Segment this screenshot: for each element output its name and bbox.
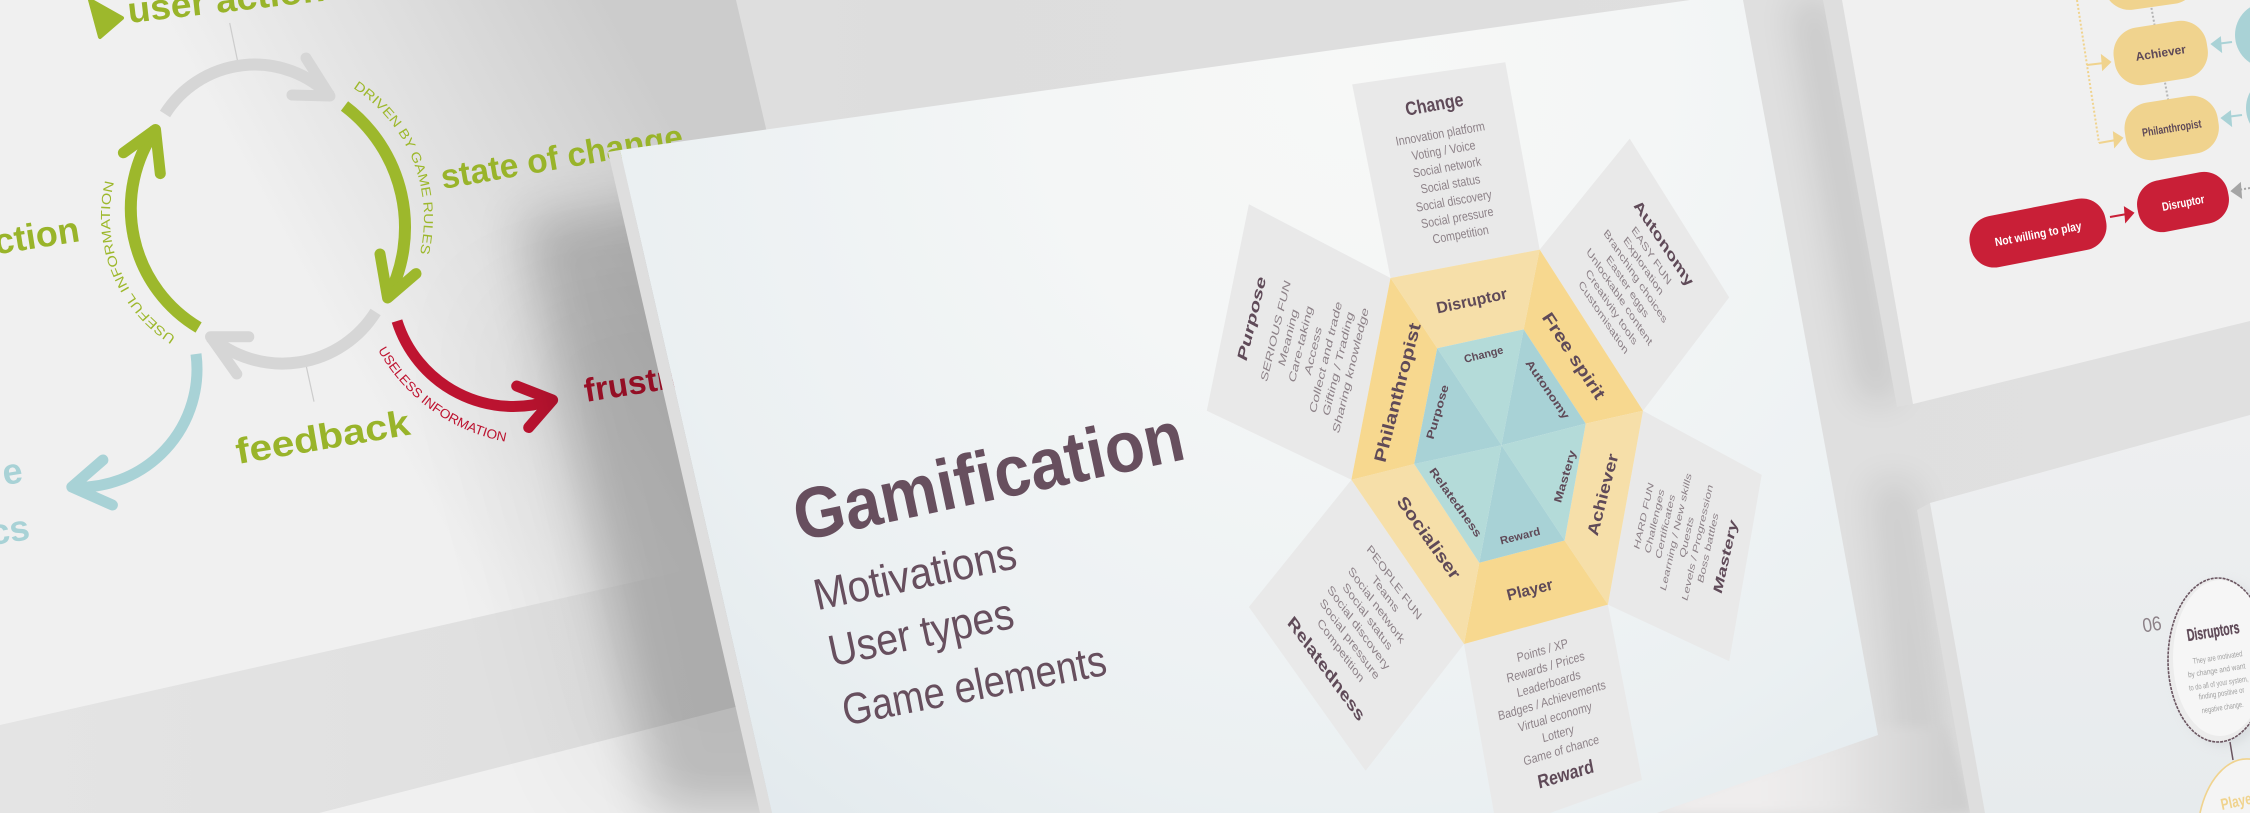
- circle: player: [2200, 759, 2250, 813]
- tick line: action: [230, 23, 238, 62]
- main slide shadows: [470, 0, 1960, 813]
- pill: achiever: [2110, 17, 2212, 89]
- dotted connector: grey between pills: [2150, 0, 2170, 110]
- pill: philanthropist: Philanthropist: [2141, 118, 2203, 140]
- label: feedback: feedback: [232, 402, 414, 472]
- dotted connector: yellow branch: [2077, 0, 2099, 143]
- card: autonomy: Autonomy: [1631, 195, 1697, 291]
- card: change: Social network: [1412, 155, 1483, 181]
- card: reward: Lottery: [1541, 722, 1575, 746]
- card: purpose: Meaning: [1276, 306, 1300, 368]
- card: change: [1352, 62, 1540, 278]
- label: state of change: state of change: [438, 118, 686, 197]
- number: 06: 06: [2141, 613, 2163, 637]
- card: change: Social status: [1419, 172, 1482, 197]
- hexagon: motivation core: [1414, 329, 1586, 563]
- arrow: teal to achiever: [2212, 38, 2232, 51]
- card: reward: Rewards / Prices: [1506, 649, 1586, 686]
- card: reward: Points / XP: [1516, 636, 1569, 665]
- card: reward: [1464, 605, 1642, 813]
- card: change: Innovation platform: [1394, 119, 1486, 149]
- panel: lower left slide: [319, 707, 900, 813]
- pill: top cropped: [2099, 0, 2201, 13]
- card: mastery: [1608, 411, 1762, 661]
- tick line: feedback: [306, 365, 314, 402]
- card: mastery: Levels / Progression: [1681, 483, 1715, 603]
- subtitle list: Game elements: [838, 636, 1110, 735]
- card: relatedness: Relatedness: [1285, 612, 1368, 725]
- card: relatedness: Social discovery: [1325, 583, 1392, 674]
- card: autonomy: Easter eggs: [1604, 253, 1650, 321]
- arrow: teal arc: [72, 354, 197, 505]
- circle: teal one: [2235, 2, 2250, 68]
- card: purpose: Gifting / Trading: [1320, 309, 1356, 418]
- card: mastery: Mastery: [1711, 516, 1741, 596]
- card: reward: Game of chance: [1522, 733, 1600, 769]
- title: Gamification: [786, 396, 1191, 557]
- hexagon: motivation core: Autonomy: [1522, 358, 1572, 423]
- hexagon: user type ring: Achiever: [1585, 452, 1622, 538]
- pill: disruptor: Disruptor: [2161, 192, 2206, 214]
- panel: feedback loop slide: [0, 0, 766, 725]
- card: autonomy: Exploration: [1621, 234, 1665, 298]
- label: frustration: frustration: [581, 347, 750, 409]
- circle: disruptors: [2168, 578, 2250, 746]
- card: autonomy: Customisation: [1577, 278, 1630, 357]
- card: relatedness: Competition: [1315, 616, 1366, 685]
- arrow: red arc: [397, 321, 553, 428]
- card: purpose: Access: [1302, 324, 1324, 377]
- hexagon: user type ring: Philanthropist: [1371, 321, 1425, 464]
- arrow: grey to disruptor: [2232, 184, 2250, 197]
- arrow: yellow to achiever: [2087, 56, 2110, 69]
- card: reward: Leaderboards: [1516, 668, 1582, 700]
- hexagon: user type ring: Disruptor: [1435, 286, 1509, 317]
- panel: main gamification slide: [608, 0, 1878, 813]
- hexagon: motivation core: Reward: [1499, 526, 1542, 547]
- card: relatedness: Social status: [1341, 580, 1394, 653]
- card: autonomy: EASY FUN: [1630, 224, 1673, 288]
- curved label: useless information: USELESS INFORMATION: [380, 346, 506, 442]
- card: relatedness: Teams: [1370, 573, 1401, 615]
- hexagon: motivation core: Purpose: [1425, 384, 1452, 441]
- connector: disruptors to player: [2230, 742, 2233, 760]
- hexagon: user type ring: Player: [1505, 577, 1555, 605]
- card: mastery: HARD FUN: [1633, 481, 1656, 551]
- subtitle list: Motivations: [809, 529, 1021, 620]
- arrow: green right arc: [344, 106, 416, 298]
- card: mastery: Challenges: [1644, 487, 1667, 555]
- card: autonomy: Creativity tools: [1584, 267, 1639, 348]
- card: purpose: SERIOUS FUN: [1258, 278, 1293, 384]
- arrow: grey bottom arc: [210, 312, 376, 374]
- card: relatedness: Social network: [1346, 564, 1407, 647]
- card: autonomy: Branching choices: [1602, 227, 1669, 326]
- arrow: red to disruptor: [2110, 208, 2133, 221]
- card: reward: Reward: [1536, 755, 1596, 793]
- panel: slide below main: [1640, 727, 1975, 813]
- card: mastery: Boss battles: [1696, 511, 1721, 585]
- hexagon: user type ring: Free spirit: [1538, 309, 1609, 403]
- card: purpose: Collect and trade: [1307, 299, 1344, 415]
- card: change: Change: [1403, 88, 1465, 120]
- arrow: teal to philanthropist: [2222, 112, 2242, 125]
- card: mastery: Learning / New skills: [1659, 471, 1694, 593]
- label: user action: [90, 0, 327, 37]
- card: change: Voting / Voice: [1411, 138, 1477, 163]
- card: purpose: [1207, 204, 1390, 480]
- hexagon: motivation core: Change: [1463, 344, 1505, 366]
- card: relatedness: [1249, 480, 1464, 771]
- curved label: driven by game rules: DRIVEN BY GAME RULES: [354, 81, 433, 254]
- hexagon: motivation core: Mastery: [1552, 448, 1579, 504]
- card: autonomy: [1540, 139, 1729, 411]
- card: mastery: Quests: [1678, 515, 1696, 560]
- curved label: useful information: USEFUL INFORMATION: [100, 181, 174, 344]
- card: purpose: Sharing knowledge: [1330, 305, 1371, 435]
- card: change: Competition: [1431, 223, 1490, 247]
- panel: user type flow slide: [1823, 0, 2250, 407]
- subtitle list: User types: [824, 589, 1018, 676]
- arrow: grey top arc: [165, 58, 330, 114]
- card: reward: Virtual economy: [1517, 700, 1593, 735]
- pill: achiever: Achiever: [2135, 42, 2187, 64]
- card: relatedness: PEOPLE FUN: [1365, 542, 1424, 623]
- pill: not willing to play: [1965, 194, 2111, 272]
- panel: user type circles slide: [1917, 415, 2250, 813]
- hexagon: motivation core: Relatedness: [1426, 466, 1484, 540]
- circle: teal two: [2246, 75, 2250, 141]
- subtitle list: [809, 529, 1110, 735]
- hexagon: user type ring: [1351, 250, 1643, 644]
- card: autonomy: Unlockable content: [1584, 246, 1655, 349]
- card: purpose: Purpose: [1234, 273, 1269, 364]
- card: purpose: Care-taking: [1286, 303, 1315, 385]
- card: relatedness: Social pressure: [1318, 596, 1382, 683]
- pill: disruptor: [2133, 168, 2233, 236]
- arrow: yellow to philanthropist: [2099, 133, 2122, 146]
- hexagon: user type ring: Socialiser: [1393, 493, 1465, 583]
- arrow: green left arc: [123, 130, 199, 328]
- pill: not willing to play: Not willing to play: [1994, 219, 2083, 249]
- card: change: Social discovery: [1415, 188, 1493, 215]
- card: reward: Badges / Achievements: [1497, 678, 1607, 724]
- card: change: Social pressure: [1420, 205, 1495, 231]
- pill: philanthropist: [2121, 92, 2223, 164]
- card: mastery: Certificates: [1654, 492, 1677, 561]
